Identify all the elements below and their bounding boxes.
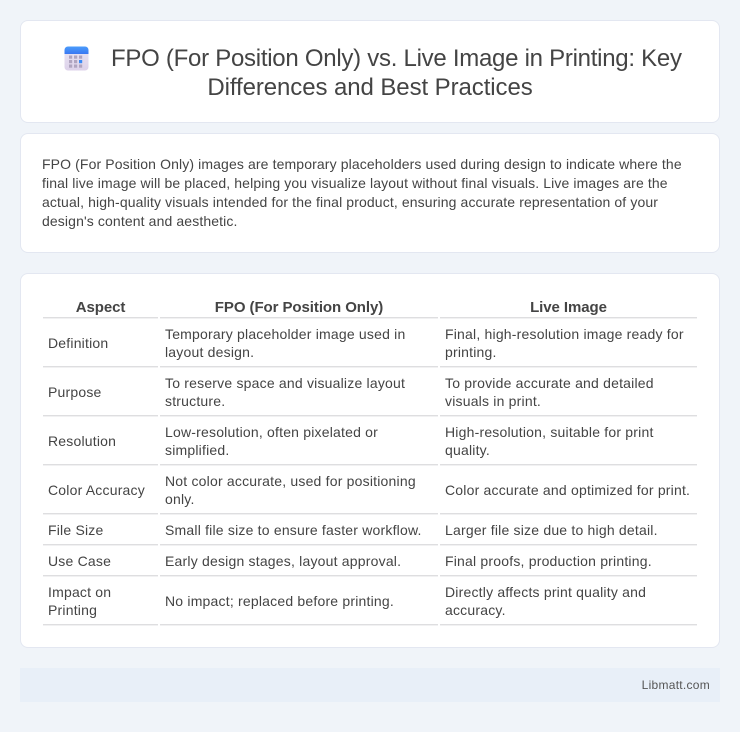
row: Impact on Printing [43, 584, 697, 626]
panel: comparison table: quality. [445, 442, 490, 458]
intro text: final live image will be placed, helping you visualize layout without final visuals. Live images are the [42, 175, 668, 191]
panel: comparison table: Color Accuracy [48, 482, 145, 498]
row: Color Accuracy [43, 473, 697, 515]
panel: comparison table: printing. [445, 344, 497, 360]
intro text: FPO (For Position Only) images are temporary placeholders used during design to indicate where the [42, 156, 682, 172]
row: Resolution [43, 424, 697, 466]
panel: comparison table: Use Case [48, 553, 111, 569]
panel: comparison table: Early design stages, layout approval. [165, 553, 401, 569]
panel: comparison table: Printing [48, 602, 97, 618]
panel: comparison table: No impact; replaced before printing. [165, 593, 394, 609]
panel: comparison table: Live Image [530, 299, 607, 316]
intro text: actual, high-quality visuals intended for the final product, ensuring accurate representation of your [42, 194, 658, 210]
panel: introduction [20, 133, 720, 253]
panel: comparison table: Low-resolution, often pixelated or [165, 424, 378, 440]
panel: comparison table: Directly affects print quality and [445, 584, 646, 600]
panel: comparison table: Resolution [48, 433, 116, 449]
panel: comparison table: FPO (For Position Only) [215, 299, 383, 316]
panel: comparison table: Color accurate and optimized for print. [445, 482, 690, 498]
title: FPO (For Position Only) vs. Live Image in Printing: Key [111, 45, 682, 72]
panel: comparison table: Definition [48, 335, 108, 351]
panel: comparison table: Impact on [48, 584, 111, 600]
icon: calendar [64, 46, 88, 70]
panel: comparison table: Final, high-resolution image ready for [445, 326, 684, 342]
panel: comparison table: layout design. [165, 344, 254, 360]
panel: comparison table: File Size [48, 522, 103, 538]
panel: title card [20, 20, 720, 123]
title [111, 45, 682, 101]
row: Use Case [43, 553, 697, 577]
table header [43, 299, 697, 319]
panel: comparison table: To reserve space and visualize layout [165, 375, 405, 391]
panel: comparison table: Temporary placeholder image used in [165, 326, 405, 342]
panel: comparison table: Purpose [48, 384, 102, 400]
footer text: Libmatt.com [642, 678, 710, 692]
intro text [42, 156, 682, 229]
panel: comparison table: visuals in print. [445, 393, 541, 409]
panel: comparison table: only. [165, 491, 195, 507]
row: Definition [43, 326, 697, 368]
footer bar [20, 668, 720, 702]
panel: comparison table: Not color accurate, used for positioning [165, 473, 416, 489]
panel: comparison table: accuracy. [445, 602, 506, 618]
panel: comparison table: Larger file size due to high detail. [445, 522, 658, 538]
row: Purpose [43, 375, 697, 417]
panel: comparison table [20, 273, 720, 648]
panel: comparison table: structure. [165, 393, 225, 409]
title: Differences and Best Practices [207, 74, 533, 101]
panel: comparison table: Aspect [76, 299, 125, 316]
panel: comparison table: Final proofs, production printing. [445, 553, 652, 569]
panel: comparison table: High-resolution, suitable for print [445, 424, 654, 440]
panel: comparison table: To provide accurate and detailed [445, 375, 654, 391]
row: File Size [43, 522, 697, 546]
panel: comparison table: simplified. [165, 442, 229, 458]
intro text: design's content and aesthetic. [42, 213, 238, 229]
panel: comparison table: Small file size to ensure faster workflow. [165, 522, 422, 538]
